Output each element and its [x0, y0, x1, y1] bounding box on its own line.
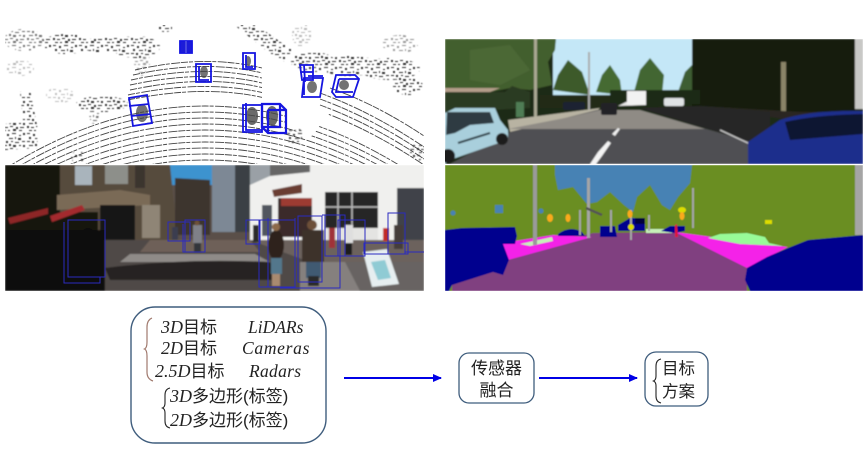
pedestrian: [675, 224, 678, 237]
box: sensor fusion: [459, 353, 534, 403]
poles: [534, 39, 537, 117]
box: sensor fusion: 传感器: [471, 359, 522, 378]
box: target proposals: 方案: [662, 382, 696, 401]
awning: [8, 208, 48, 224]
row: 3D target LiDARs: LiDARs: [247, 317, 304, 337]
trees: [445, 39, 556, 92]
cars: [445, 227, 517, 291]
terrain: [708, 233, 783, 246]
lidar radial gaps: [262, 68, 330, 136]
road: [450, 110, 752, 164]
lidar 3D bounding boxes: [129, 41, 359, 133]
car right: [748, 111, 863, 164]
brace: polygons: [162, 388, 170, 428]
row: 2D target Cameras: 2D目标: [161, 338, 217, 358]
buildings: [58, 166, 174, 240]
row: 2.5D target Radars: 2.5D目标: [155, 361, 224, 381]
road region: [452, 232, 747, 291]
grass and sidewalk: [508, 108, 600, 132]
wall region: [855, 165, 863, 235]
row: 3D target LiDARs: 3D目标: [160, 317, 217, 337]
sky: [553, 39, 695, 99]
row: 2D target Cameras: Cameras: [242, 338, 310, 358]
arrow: fusion to targets: [539, 377, 637, 379]
poles: [533, 165, 537, 245]
brace: proposals: [654, 359, 661, 403]
row: 2.5D target Radars: Radars: [248, 361, 301, 381]
panel: road photo: [441, 39, 863, 164]
box: target proposals: [645, 352, 708, 406]
box: target proposals: 目标: [662, 359, 695, 378]
arrow: input to fusion: [344, 377, 441, 379]
sidewalks: [502, 235, 592, 260]
lidar scan arcs: [12, 61, 424, 164]
pedestrian 3D boxes: [64, 213, 424, 288]
ground: [104, 239, 302, 290]
sign board: [363, 249, 399, 287]
brace: sensors: [144, 318, 153, 381]
vegetation: [445, 165, 863, 291]
sky region: [555, 165, 692, 212]
row: 2D polygon labels: 2D多边形(标签): [170, 410, 288, 430]
vehicles: [617, 100, 642, 108]
row: 2.5D target Radars: [155, 361, 301, 381]
row: 3D polygon labels: 3D多边形(标签): [169, 386, 288, 406]
sky: [170, 165, 215, 185]
car left: [445, 108, 508, 164]
row: 2D target Cameras: [161, 338, 310, 358]
pedestrians: [84, 228, 92, 230]
traffic signs and lights: [547, 214, 553, 222]
input box: [131, 307, 326, 443]
row: 3D target LiDARs: [160, 317, 304, 337]
lidar noise clusters: [4, 20, 424, 163]
panel: lidar point cloud with 3D boxes: [5, 25, 424, 164]
box: sensor fusion: 融合: [480, 381, 514, 400]
panel: semantic segmentation: [445, 165, 863, 291]
panel: street photo with pedestrian boxes: [5, 165, 424, 291]
